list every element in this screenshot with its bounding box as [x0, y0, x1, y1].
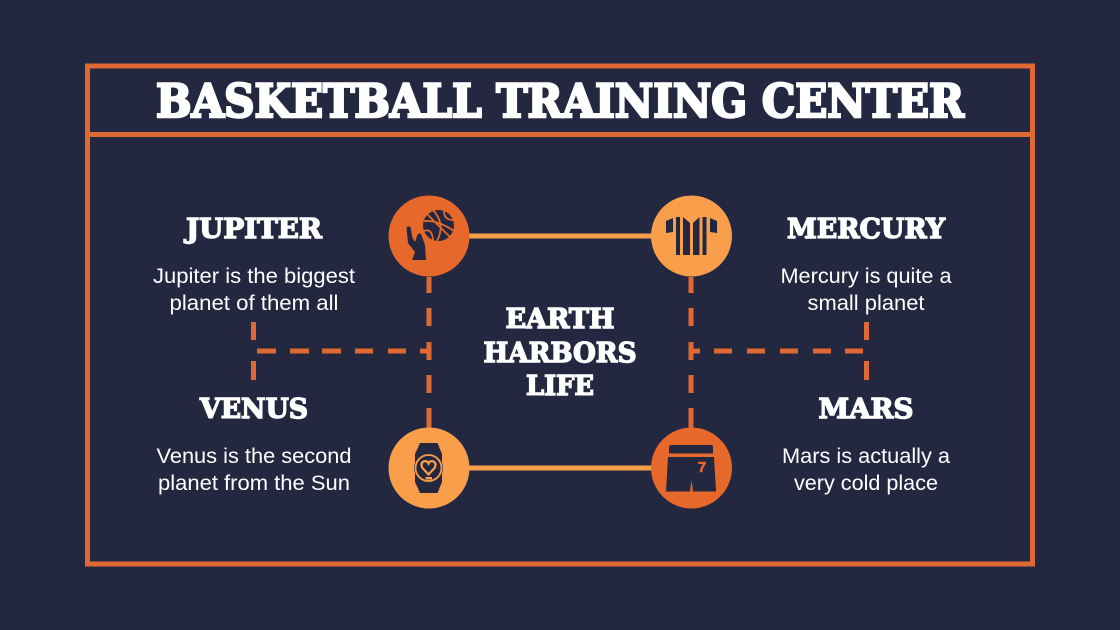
text block: Venus: planet from the Sun — [158, 472, 350, 495]
text block: Jupiter: JUPITER — [184, 214, 323, 245]
text block: Mars — [782, 394, 950, 495]
icon: hand with basketball — [388, 196, 470, 276]
icon: smartwatch with heart — [388, 428, 470, 508]
icon: shorts with number 7: 7 — [698, 459, 706, 476]
connector: top solid line — [465, 234, 655, 238]
text block: Mercury — [780, 214, 952, 315]
text block: Mars: MARS — [818, 394, 914, 425]
text block: Mercury: small planet — [808, 292, 925, 315]
connector: bottom solid line — [465, 466, 655, 470]
connector: right dashed lines — [691, 277, 866, 428]
text block: Jupiter: Jupiter is the biggest — [153, 265, 355, 288]
center text: HARBORS — [484, 338, 636, 369]
text block: Jupiter — [153, 214, 355, 315]
text block: Jupiter: planet of them all — [170, 292, 338, 315]
text block: Venus — [156, 394, 352, 495]
center text — [484, 304, 636, 402]
outer frame — [88, 66, 1032, 564]
icon: referee shirt — [651, 196, 732, 276]
icon: shorts with number 7 — [651, 428, 732, 508]
center text: EARTH — [506, 304, 614, 335]
connector: left dashed lines — [254, 277, 429, 428]
center text: LIFE — [526, 371, 594, 402]
text block: Venus: VENUS — [199, 394, 308, 425]
text block: Mercury: Mercury is quite a — [780, 265, 952, 288]
text block: Mars: Mars is actually a — [782, 445, 950, 468]
text block: Venus: Venus is the second — [156, 445, 352, 468]
text block: Mercury: MERCURY — [787, 214, 946, 245]
text block: Mars: very cold place — [794, 472, 938, 495]
title: BASKETBALL TRAINING CENTER — [156, 74, 965, 128]
